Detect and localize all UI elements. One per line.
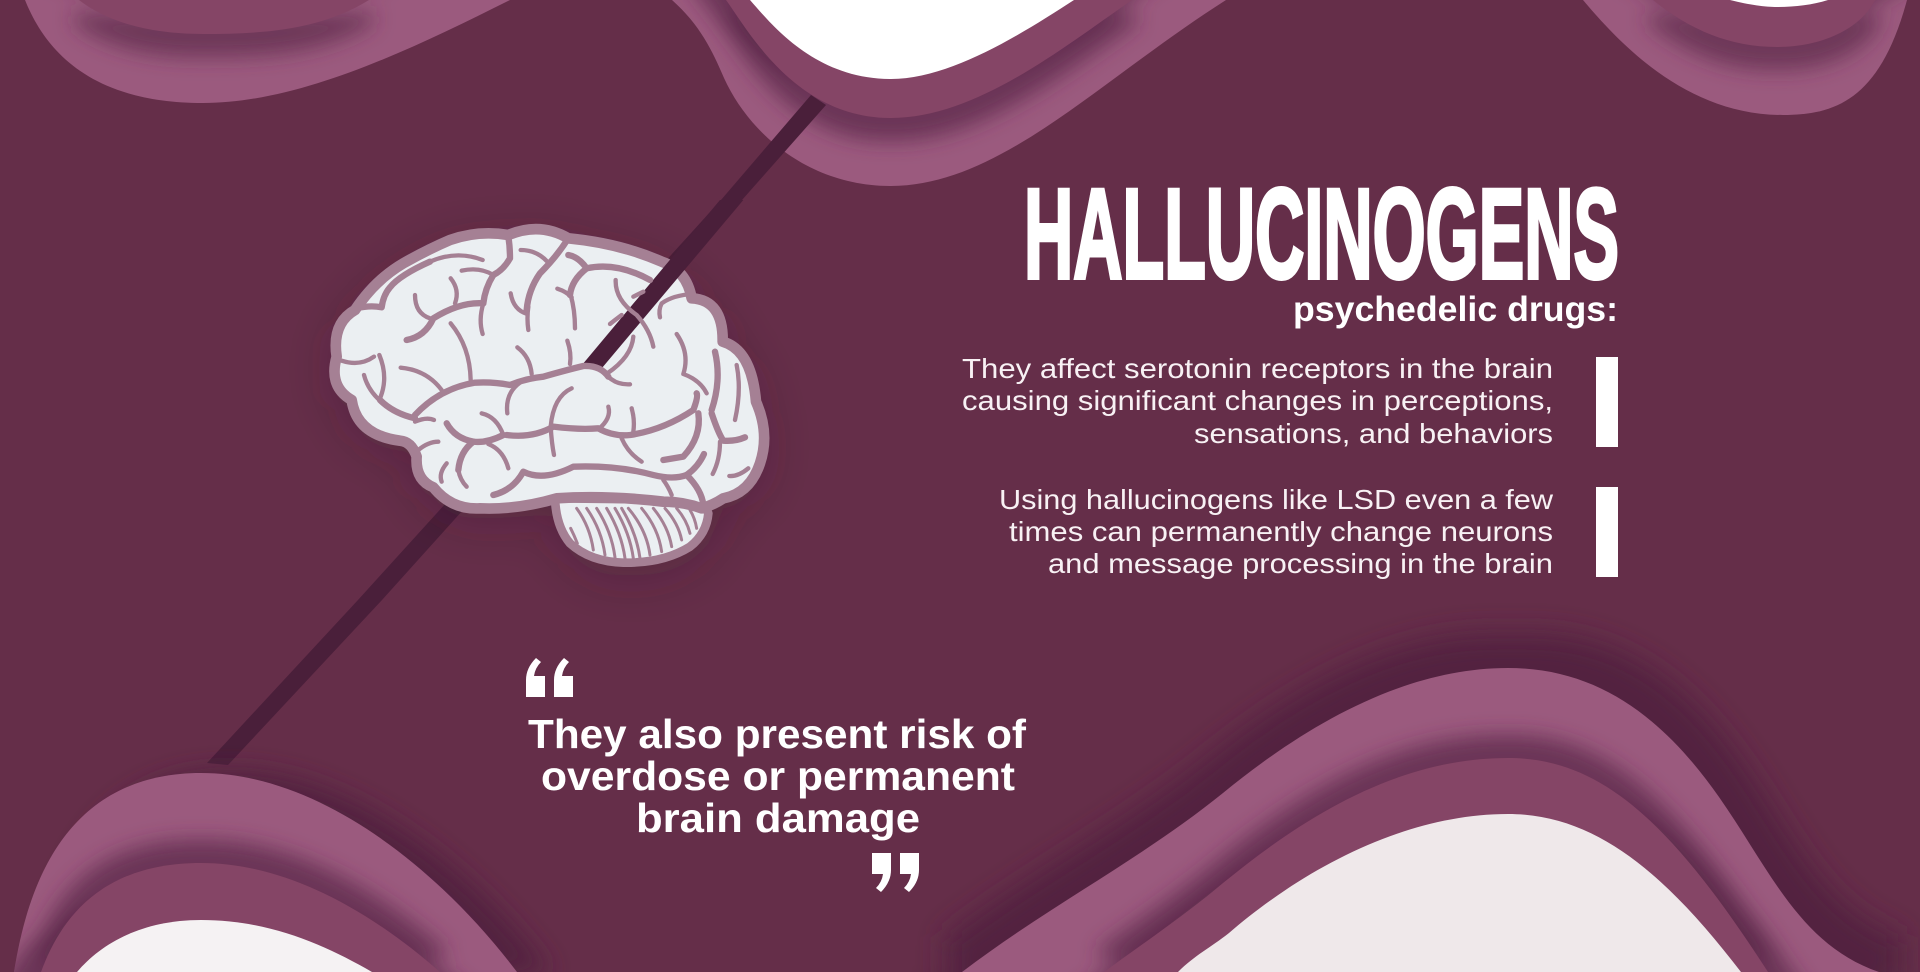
brain shadow	[334, 229, 764, 567]
brain folds	[342, 237, 748, 505]
icon: opening quote mark	[526, 658, 573, 697]
quote text: overdose or permanent	[541, 753, 1015, 799]
upper part of diagonal line over brain	[583, 200, 743, 368]
text: serotonin receptors: causing significant changes in perceptions,	[962, 385, 1553, 416]
bar 1	[1596, 357, 1618, 447]
text: LSD effects: and message processing in the brain	[1048, 548, 1553, 579]
text: LSD effects: Using hallucinogens like LSD even a few	[999, 484, 1554, 515]
quote text: They also present risk of	[528, 711, 1026, 757]
bar 2	[1596, 487, 1618, 577]
icon: brain	[334, 200, 764, 567]
subtitle: psychedelic drugs:	[1293, 290, 1618, 329]
text: serotonin receptors: sensations, and behaviors	[1194, 418, 1553, 449]
wave: bottom right	[962, 668, 1879, 972]
text: LSD effects: times can permanently change neurons	[1009, 516, 1553, 547]
wave: top center outer layer	[672, 0, 1226, 186]
wave: bottom left	[14, 773, 517, 972]
cerebellum	[555, 498, 708, 563]
wave: top right	[1583, 0, 1907, 115]
text: serotonin receptors: They affect serotonin receptors in the brain	[962, 353, 1553, 384]
quote text	[528, 711, 1026, 841]
diagonal line	[207, 95, 826, 765]
cerebrum silhouette	[334, 229, 764, 509]
text: LSD effects	[999, 484, 1554, 579]
icon: closing quote mark	[872, 853, 919, 892]
text: serotonin receptors	[962, 353, 1553, 449]
wave: top left	[25, 0, 510, 103]
bullet block 1	[962, 353, 1618, 449]
bullet block 2	[999, 484, 1618, 579]
wave: top center inner layers	[726, 0, 1132, 118]
quote text: brain damage	[636, 795, 920, 841]
